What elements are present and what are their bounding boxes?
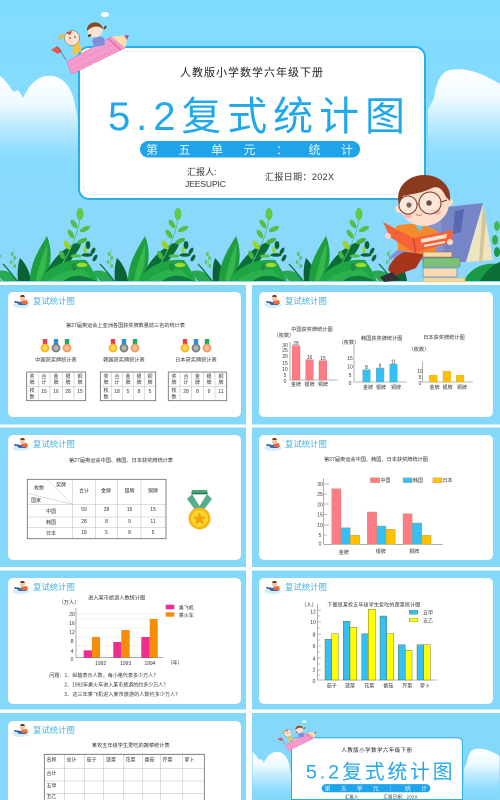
vegetables bar chart: 0 [313,679,316,685]
label: china: 中国获奖牌统计表 [35,356,78,364]
chart: china: 28 [293,341,299,347]
slide: three bar charts [252,285,500,424]
label: japan: 日本获奖牌统计表 [175,356,218,364]
reporter: JEESUPIC [185,179,226,189]
icon: medals japan [181,339,211,352]
table [27,479,166,539]
tourist bar chart: 16 [69,621,75,627]
table: korea: 数 [103,394,109,400]
chart: china [274,325,338,388]
chart: china: 15 [282,361,288,367]
tourist bar chart: 1993 [120,661,131,667]
chart: japan: （枚数） [409,345,429,353]
table: china [27,372,86,401]
tourist bar chart: （年） [167,660,183,666]
table: korea: 8 [138,389,141,395]
table: 国家 [31,497,41,504]
table: 韩国 [46,519,56,526]
slide: grouped bar chart [252,428,500,567]
grouped bar chart: 5 [319,533,322,539]
table: 5 [152,530,155,536]
table: 日本 [46,530,56,537]
tourist bar chart [59,599,183,667]
table: 茄子 [86,756,97,764]
legend [409,610,433,624]
table: korea: 奖 [103,373,109,380]
table: korea: 金 [125,373,131,380]
chart: china: 金牌 [291,381,301,388]
table: 18 [81,530,87,536]
heading: 复试统计图 [33,582,75,592]
table: 59 [81,507,87,513]
chart: korea: 金牌 [363,384,373,391]
grouped bar chart [317,477,453,556]
table: 芹菜 [162,756,173,764]
table: 28 [81,519,87,525]
questions: 问题：1、纵轴表示人数，每小格代表多少万人？ [49,672,158,679]
tourist bar chart: 8 [71,639,74,645]
tourist bar chart: 12 [69,630,75,636]
grouped bar chart: 0 [319,542,322,548]
vegetables bar chart: 6 [313,644,316,650]
table: japan: 数 [171,394,177,400]
slide: summary table [0,428,246,567]
chart: korea: 韩国获奖牌统计图 [361,334,402,342]
slide: medal tables [0,285,246,424]
chart: japan: 5 [419,375,422,381]
table: china: 铜 [77,373,83,380]
vegetables bar chart [301,602,437,690]
chart: japan: 10 [417,369,423,375]
header icon [12,724,30,737]
header icon [12,581,30,594]
table: japan: 11 [218,389,224,395]
table: 11 [150,519,156,525]
table: china: 数 [29,394,35,400]
chart: china: 5 [284,373,287,379]
table: china: 奖 [29,373,35,380]
grouped bar chart: 30 [317,482,323,488]
table: 16 [127,507,132,513]
table: 合计 [79,488,89,494]
label: korea: 韩国获奖牌统计表 [103,356,146,364]
subtitle: 人教版小学数学六年级下册 [180,65,323,79]
vegetables bar chart: 10 [310,620,316,626]
chart: korea: 15 [347,356,353,362]
closing cover content: 第五单元：统计 [325,785,427,793]
legend: 乘火车 [179,612,194,619]
chart: korea: 11 [391,360,396,366]
slide: blank vegetables table [0,713,246,800]
table: korea: 计 [114,379,120,386]
table: china: 枚 [29,387,35,394]
table: japan: 8 [196,389,199,395]
chart: korea: 铜牌 [391,384,401,391]
table: korea: 牌 [103,379,109,386]
chart: china: 20 [282,354,288,360]
chart: china: 30 [282,343,288,349]
table caption: 第27届奥运会上亚洲各国获奖牌数量前三名的统计表 [66,321,186,329]
table: japan: 银 [206,373,212,380]
table: china: 合 [41,373,47,380]
chart: japan: 银牌 [442,384,453,391]
main title: 5.2复式统计图 [108,95,405,139]
chart: china: 银牌 [304,381,315,388]
grouped bar chart: 韩国 [413,477,423,484]
icon: kids on pencil rocket [51,12,129,74]
icon: plants [0,208,500,281]
heading: 复试统计图 [33,296,75,306]
grouped bar chart: 银牌 [376,548,386,555]
grouped bar chart: 金牌 [339,549,349,556]
closing cover content [252,720,500,800]
table: 8 [128,530,131,536]
header icon [12,438,30,451]
table: 枚数 [34,484,44,492]
cover slide [0,0,500,282]
chart: korea: 10 [347,364,353,370]
table: 5 [105,530,108,536]
vegetables bar chart: 花菜 [364,682,374,690]
heading: 复试统计图 [285,439,327,449]
table: korea: 牌 [125,379,131,386]
vegetables bar chart: 番茄 [383,682,393,690]
table: 萝卜 [184,756,195,764]
chart: china: 10 [282,367,288,373]
table: china: 15 [41,389,47,395]
table: 15 [150,507,156,513]
table: 番茄 [144,756,155,764]
heading: 复试统计图 [285,582,327,592]
chart: china: 0 [284,379,287,385]
chart: china: 铜牌 [318,381,328,388]
chart caption: 进入某市旅游人数统计图 [88,594,145,602]
table: japan: 牌 [206,379,212,386]
chart: china: 中国获奖牌统计图 [291,325,333,333]
chart: japan: 金牌 [429,384,440,391]
slide: tourist chart and questions [0,570,246,710]
title card [79,47,425,199]
heading: 复试统计图 [33,725,75,735]
slide: closing cover [252,713,500,800]
table: 奖牌 [56,482,66,488]
table: korea: 5 [149,389,152,395]
table: korea: 银 [136,373,142,380]
table: japan: 牌 [218,379,224,386]
vegetables bar chart: 菠菜 [345,682,355,690]
table: china: 银 [65,373,71,380]
chart: japan: 铜牌 [457,384,467,391]
grouped bar chart: 20 [317,502,323,508]
chart: korea: 0 [349,381,352,387]
legend: 五乙 [423,618,433,624]
table: 五甲 [46,784,57,790]
legend [166,604,194,619]
table: china: 牌 [65,379,71,386]
table: 28 [104,507,109,513]
table: china: 15 [77,389,83,395]
tourist bar chart: 1992 [95,661,106,667]
table: japan: 奖 [171,373,177,380]
questions: 2、1992年乘火车进入某市旅游的约多少万人？ [64,682,168,688]
table: japan: 铜 [218,373,224,380]
table: japan: 牌 [171,379,177,386]
chart: korea: 5 [349,373,352,379]
vegetables bar chart: 萝卜 [420,682,430,690]
table: korea: 牌 [147,379,153,386]
chart: japan: 日本获奖牌统计图 [423,333,465,341]
icon: boy reading [380,175,493,282]
table: 花菜 [126,756,136,764]
chart: korea: 9 [379,364,382,370]
header icon [12,295,30,308]
table: japan: 合 [183,373,189,380]
closing cover content: 5.2复式统计图 [306,762,453,784]
icon: medals china [41,339,71,352]
tourist bar chart: 4 [71,649,74,655]
icon: medals korea [109,339,139,352]
questions [49,672,180,698]
reporter: 汇报人: [187,166,217,177]
table: 中国 [46,508,56,515]
table: japan: 28 [183,389,189,395]
table: china: 计 [41,379,47,386]
unit pill: 第五单元：统计 [146,143,353,157]
tourist bar chart: 20 [69,612,75,618]
vegetables bar chart: 12 [310,610,316,616]
tourist bar chart: 0 [71,657,74,663]
table: 合计 [46,770,57,777]
table: korea: 牌 [136,379,142,386]
chart: korea: （枚数） [339,338,359,346]
table: china: 16 [53,389,59,395]
slide: vegetables bar chart [252,570,500,710]
table: japan [168,372,227,401]
chart: korea: 8 [365,365,368,371]
chart: japan [409,333,473,391]
table: japan: 计 [183,379,189,386]
grouped bar chart: 15 [317,512,323,518]
table: 8 [105,519,108,525]
legend: 五甲 [423,610,433,616]
report date: 汇报日期：202X [265,171,334,182]
table: korea [100,372,156,401]
vegetables bar chart: 4 [313,656,316,662]
grouped bar chart: 25 [317,492,323,498]
grouped bar chart: 日本 [442,477,453,484]
closing cover content: 汇报日期：202X [383,793,418,800]
table caption: 第27届奥运会中国、韩国、日本获奖牌统计表 [69,456,174,464]
table: china: 牌 [29,379,35,386]
tourist bar chart: 1994 [144,661,156,667]
heading: 复试统计图 [33,439,75,449]
table: china: 牌 [77,379,83,386]
legend: 乘飞机 [179,604,194,612]
vegetables bar chart: 茄子 [327,682,337,690]
header icon [264,295,282,308]
table: 铜牌 [148,488,158,494]
table: korea: 18 [114,389,120,395]
sky background [0,0,500,282]
table: china: 28 [65,389,71,395]
chart: japan: 0 [419,381,422,387]
table: japan: 牌 [195,379,200,386]
table: 银牌 [124,488,135,494]
vegetables bar chart: 2 [313,668,316,674]
grouped bar chart: 铜牌 [409,548,419,555]
vegetables bar chart: （人） [301,602,317,608]
table: korea: 合 [114,373,120,380]
table: japan: 9 [208,389,211,395]
table: china: 牌 [53,379,59,386]
table: 名称 [46,756,57,764]
table: japan: 枚 [171,387,177,394]
table caption: 某校五年级学生爱吃的蔬菜统计表 [92,741,170,749]
header icon [264,581,282,594]
header icon [264,438,282,451]
table: korea: 枚 [103,387,109,394]
table: 金牌 [101,488,111,494]
grouped bar chart: 中国 [380,477,391,484]
chart: china: （枚数） [274,331,294,339]
closing cover content: 人教版小学数学六年级下册 [341,746,413,754]
vegetables bar chart: 芹菜 [402,682,412,690]
chart caption: 第27届奥运会中国、韩国、日本获奖牌统计图 [324,455,428,463]
table [44,754,204,800]
icon: gold medal [187,490,212,530]
table: japan: 金 [195,373,200,380]
table: china: 金 [53,373,59,380]
grouped bar chart: 10 [317,523,323,529]
table: korea: 铜 [147,373,153,380]
heading: 复试统计图 [285,296,327,306]
table: 总计 [66,756,77,764]
table: 五乙 [46,793,57,800]
chart: korea: 银牌 [376,384,386,391]
chart: korea [339,334,407,391]
reporter [185,166,226,189]
chart: china: 15 [320,356,326,362]
table: 9 [128,519,131,525]
questions: 3、这三年乘飞机进入某市旅游的人数约多少万人？ [64,691,180,698]
table: 菠菜 [106,756,116,764]
table: korea: 5 [127,389,130,395]
closing cover content: 汇报人: [345,793,359,800]
tourist bar chart: （万人） [59,599,79,606]
vegetables bar chart: 8 [313,632,316,638]
clouds [0,69,500,168]
chart caption: 下图是某校五年级学生爱吃的蔬菜统计图 [327,602,420,608]
chart: china: 16 [307,355,312,361]
chart: china: 25 [282,348,288,354]
